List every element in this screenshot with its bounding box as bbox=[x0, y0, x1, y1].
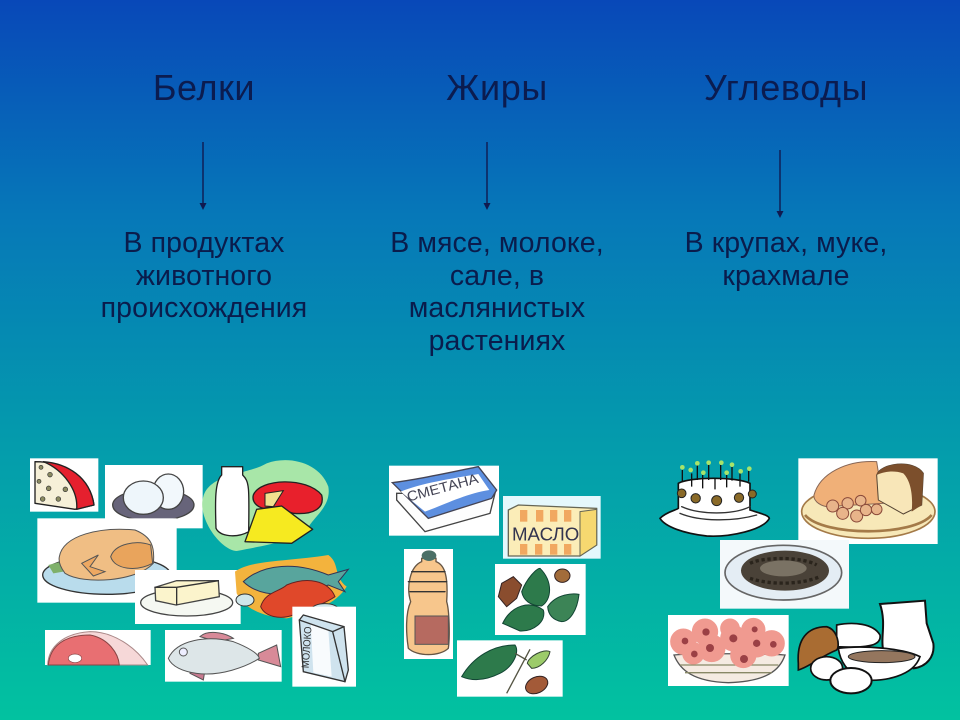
arrow: Жиры bbox=[484, 142, 490, 210]
icon: roast chicken bbox=[37, 518, 177, 603]
heading: Жиры: Жиры bbox=[446, 67, 548, 108]
text: белки: В продуктах bbox=[123, 227, 285, 259]
text: белки: животного bbox=[136, 260, 272, 292]
icon: fish bbox=[165, 630, 282, 682]
text: белки: происхождения bbox=[101, 292, 307, 324]
icon: milk carton: МОЛОКО bbox=[301, 626, 315, 669]
icon: hazelnut branch bbox=[495, 564, 586, 635]
icon: ham bbox=[45, 630, 151, 665]
panel: carbohydrate foods bbox=[660, 458, 938, 693]
text: жиры: сале, в bbox=[450, 260, 544, 292]
icon: fish and lobster bbox=[235, 555, 348, 618]
panel: fat foods bbox=[389, 466, 601, 697]
icon: cheese wedge bbox=[30, 458, 98, 512]
arrow: Углеводы bbox=[776, 150, 784, 218]
icon: birthday cake bbox=[660, 460, 769, 536]
icon: milk carton bbox=[292, 607, 356, 687]
arrow: Белки bbox=[200, 142, 206, 210]
icon: bread basket bbox=[798, 458, 938, 544]
icon: sour cream tub: СМЕТАНА bbox=[405, 470, 481, 505]
text: углеводы: В крупах, муке, bbox=[685, 227, 887, 259]
icon: butter box bbox=[503, 496, 601, 559]
icon: oil bottle bbox=[404, 549, 453, 659]
icon: sour cream tub bbox=[389, 466, 499, 536]
text: жиры: В мясе, молоке, bbox=[390, 227, 604, 259]
icon: milk bottle and cheese bbox=[202, 460, 329, 551]
icon: butter box: МАСЛО bbox=[512, 524, 579, 545]
text: углеводы: крахмале bbox=[722, 260, 850, 292]
heading: Белки: Белки bbox=[153, 67, 255, 108]
icon: eggs on plate bbox=[105, 465, 203, 528]
icon: cookie basket bbox=[668, 615, 789, 686]
icon: flour, bread, eggs bbox=[798, 601, 934, 693]
panel: protein foods bbox=[30, 458, 356, 687]
icon: leaf and nut bbox=[457, 640, 563, 697]
text: жиры: растениях bbox=[429, 325, 565, 357]
heading: Углеводы: Углеводы bbox=[704, 67, 868, 108]
text: жиры: маслянистых bbox=[409, 292, 585, 324]
icon: buckwheat plate bbox=[720, 540, 849, 609]
icon: butter on plate bbox=[135, 570, 241, 624]
